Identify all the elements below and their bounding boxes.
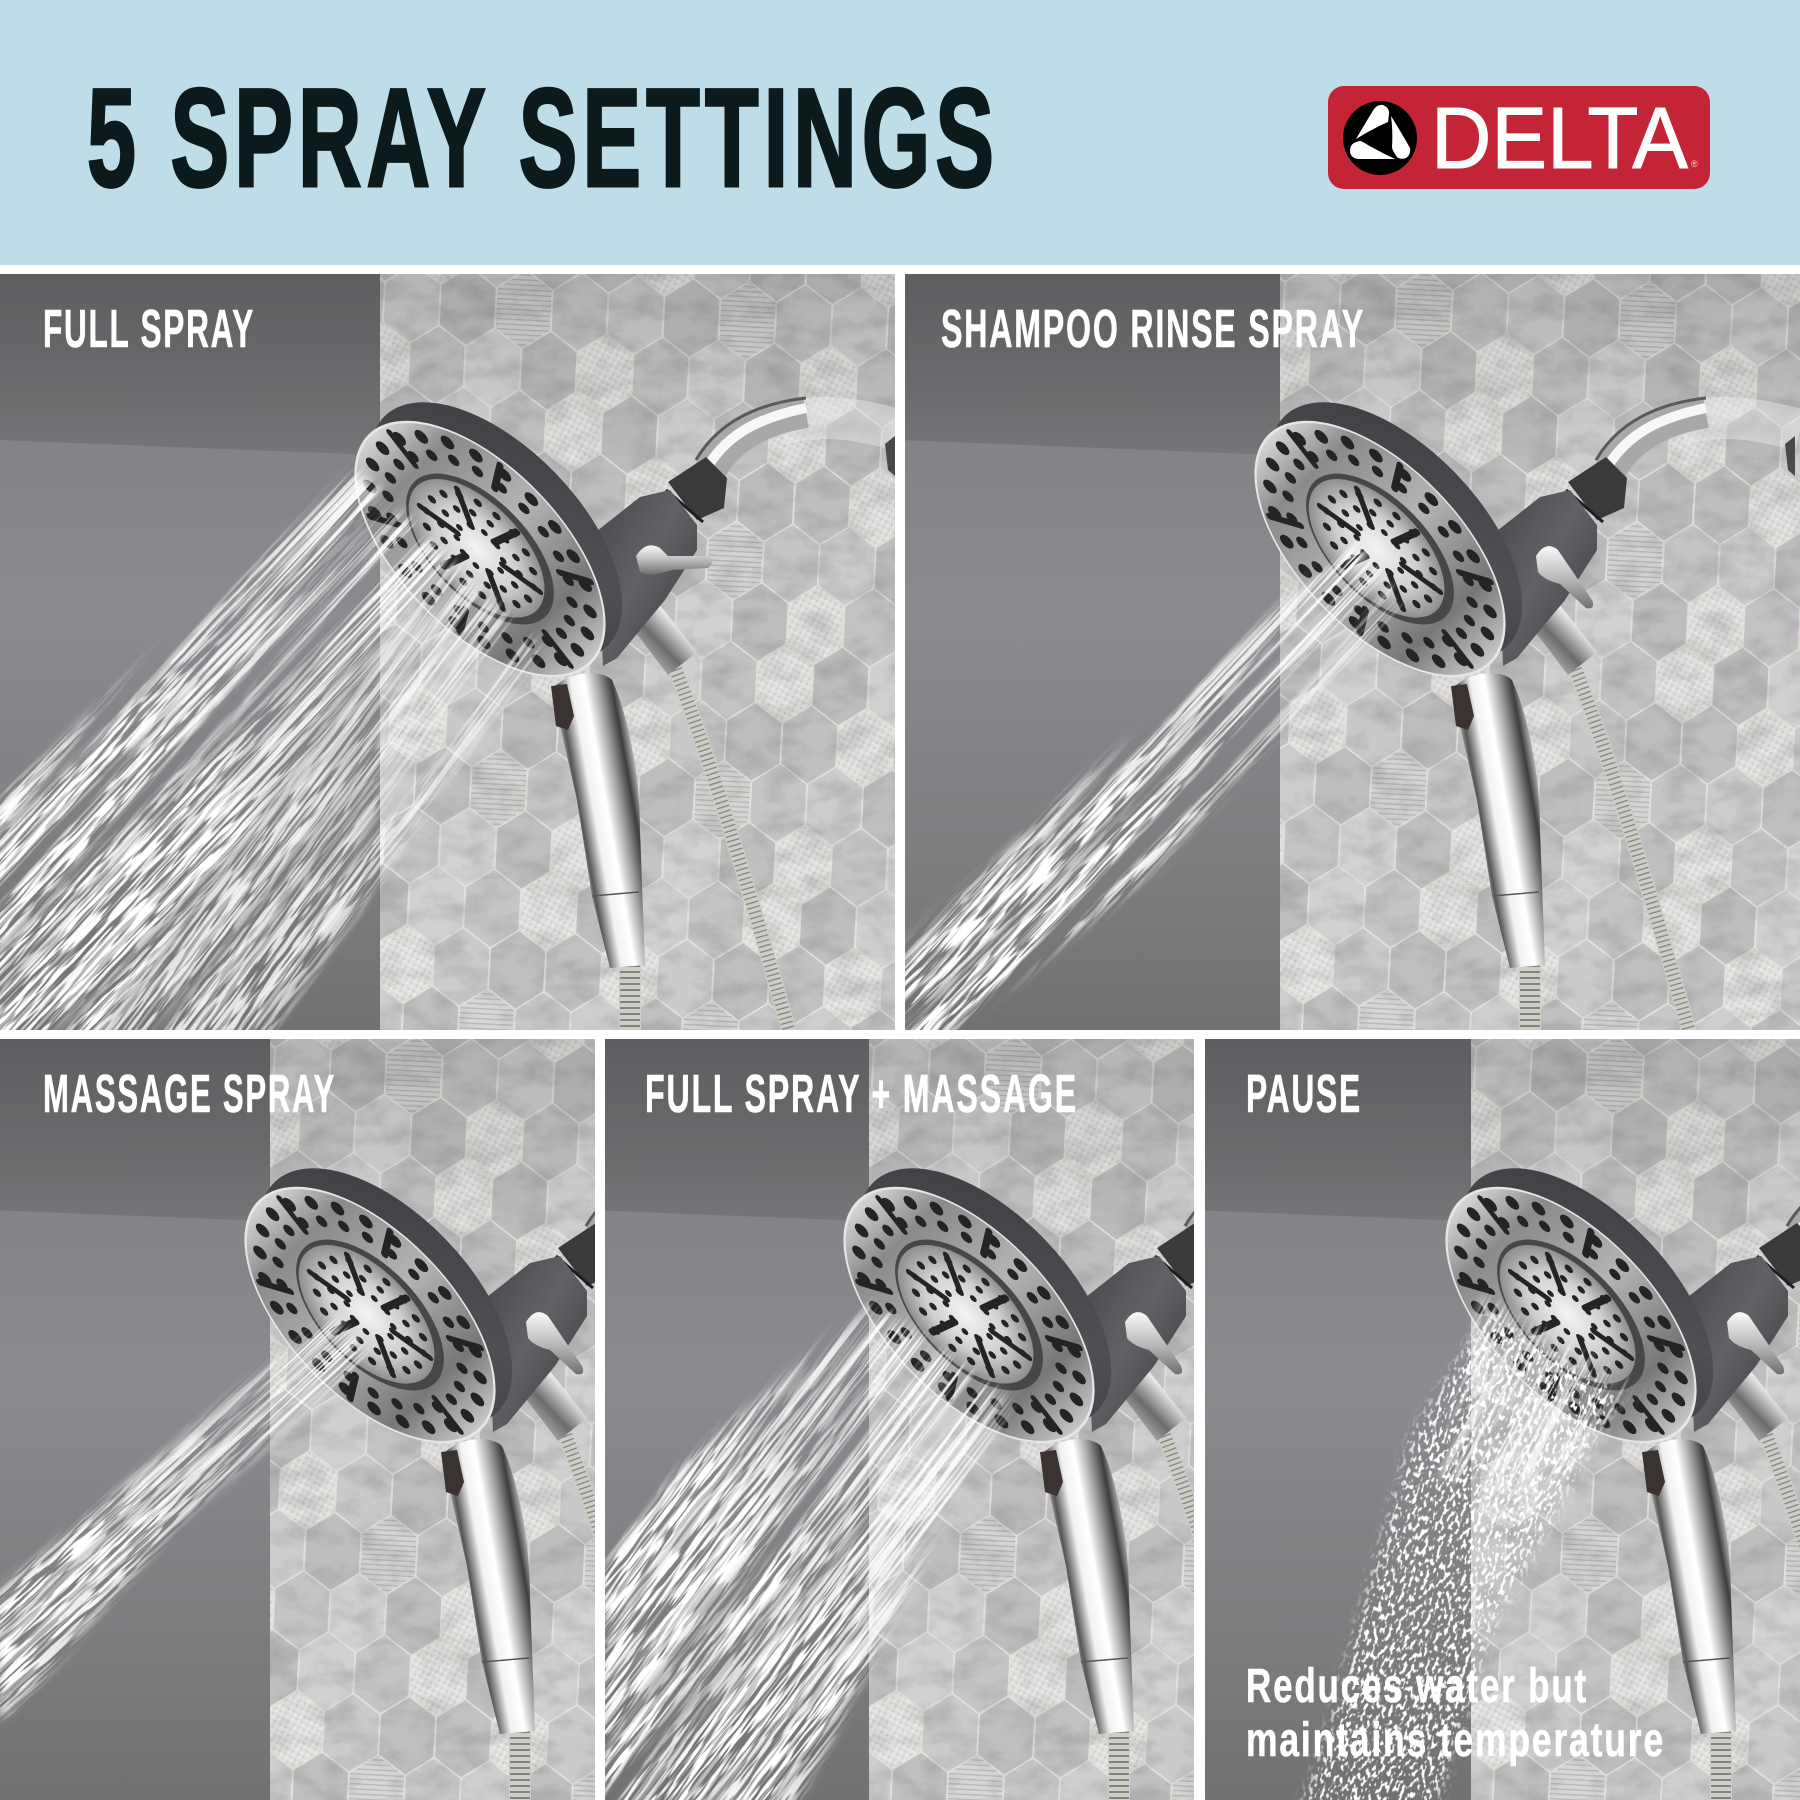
header band	[0, 0, 1800, 265]
title: 5 SPRAY SETTINGS	[87, 59, 999, 216]
registered mark: ®	[1691, 159, 1698, 169]
lever	[1727, 1312, 1784, 1374]
water spray	[0, 468, 543, 1030]
logo wordmark: DELTA	[1431, 90, 1688, 187]
shower head scene	[900, 273, 1800, 1034]
panel: pause	[1205, 1039, 1800, 1800]
icon: Delta tri-blade mark	[1343, 101, 1417, 175]
shower head scene	[605, 1039, 1194, 1800]
lever	[636, 545, 712, 575]
label: full spray: FULL SPRAY	[43, 299, 255, 359]
water spray	[605, 1299, 1017, 1800]
shower head scene	[0, 1039, 595, 1800]
shower head scene	[1205, 1039, 1800, 1800]
panel: shampoo rinse spray	[900, 273, 1800, 1034]
lever	[1125, 1312, 1182, 1374]
label: pause: PAUSE	[1246, 1064, 1362, 1124]
panel: full spray	[0, 273, 900, 1034]
lever	[526, 1312, 583, 1374]
panel: massage spray	[0, 1039, 595, 1800]
caption: pause description	[1246, 1660, 1665, 1767]
shower head scene	[0, 273, 900, 1034]
water spray	[905, 538, 1404, 1030]
caption: pause description: maintains temperature	[1246, 1714, 1665, 1767]
water droplets	[1205, 1039, 1800, 1800]
logo: Delta	[1328, 86, 1710, 189]
label: full spray + massage: FULL SPRAY + MASSAGE	[645, 1064, 1078, 1124]
label: shampoo rinse spray: SHAMPOO RINSE SPRAY	[941, 299, 1365, 359]
label: massage spray: MASSAGE SPRAY	[43, 1064, 336, 1124]
logo background	[1328, 86, 1710, 189]
caption: pause description: Reduces water but	[1246, 1660, 1588, 1713]
lever	[1536, 546, 1593, 608]
panel: full spray + massage	[605, 1039, 1194, 1800]
water spray	[0, 1311, 369, 1723]
